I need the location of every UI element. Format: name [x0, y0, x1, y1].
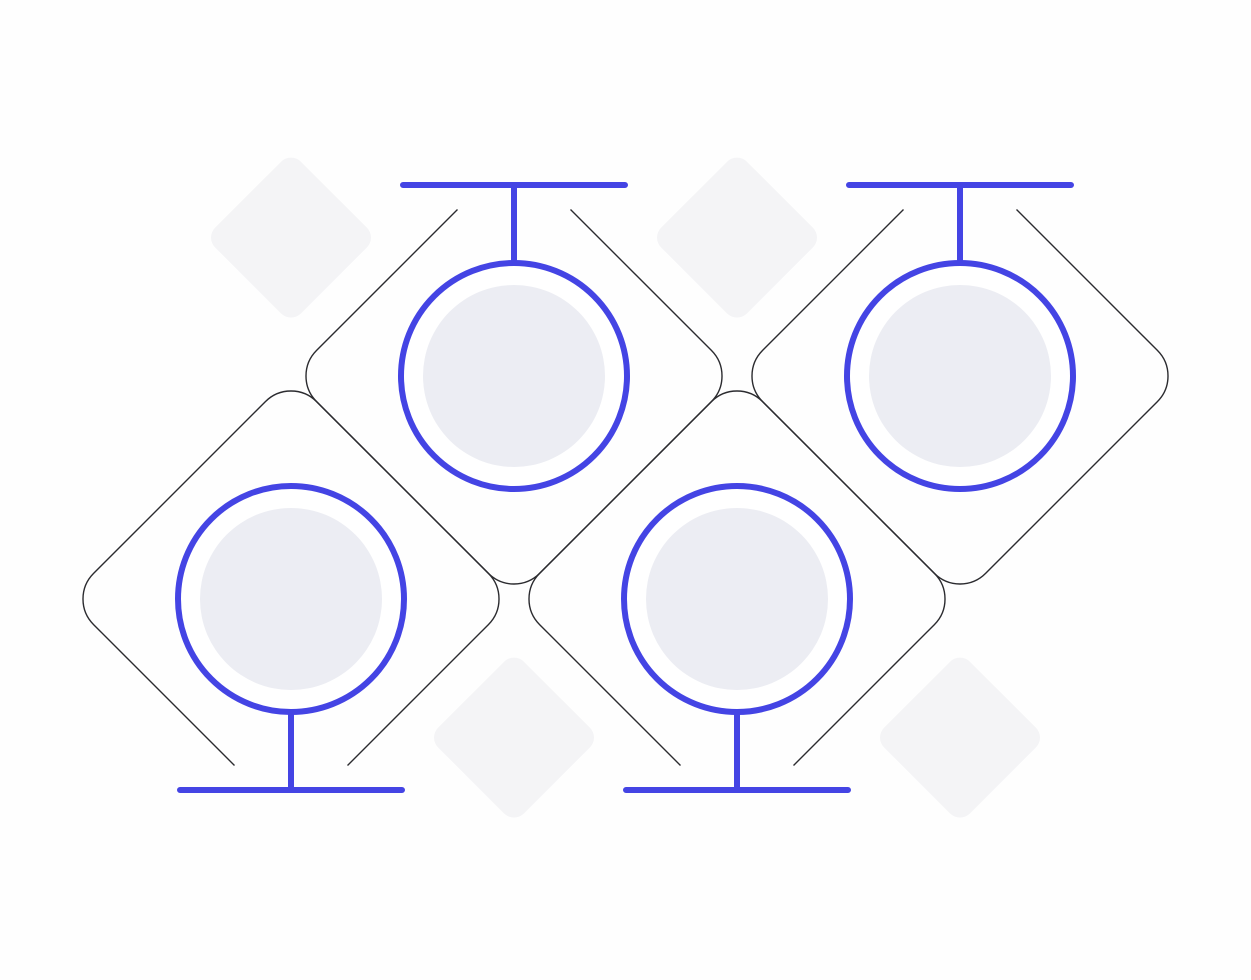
diamond: top left: [205, 152, 377, 323]
step 1 image placeholder: [200, 508, 382, 690]
step 3 connector and bar: [626, 712, 848, 790]
step 2 connector and bar: [403, 185, 625, 263]
diamond: bottom right: [874, 652, 1046, 823]
diamond: bottom middle: [428, 652, 600, 823]
step 4 outline: [752, 210, 1168, 584]
step 2 ring: [401, 263, 627, 489]
decorative diamonds: [205, 152, 1046, 823]
step 3 ring: [624, 486, 850, 712]
step 1 connector and bar: [180, 712, 402, 790]
step 3 outline: [529, 391, 945, 766]
step 3 marker: [624, 486, 850, 790]
step 1 ring: [178, 486, 404, 712]
diamond: top middle: [651, 152, 823, 323]
step 4 connector and bar: [849, 185, 1071, 263]
step 4 ring: [847, 263, 1073, 489]
step 2 image placeholder: [423, 285, 605, 467]
step 1 outline: [83, 391, 499, 766]
step 2 outline: [306, 210, 722, 584]
step 3 image placeholder: [646, 508, 828, 690]
step 2 marker: [401, 185, 627, 489]
step 1 marker: [178, 486, 404, 790]
step 4 image placeholder: [869, 285, 1051, 467]
step 4 marker: [847, 185, 1073, 489]
